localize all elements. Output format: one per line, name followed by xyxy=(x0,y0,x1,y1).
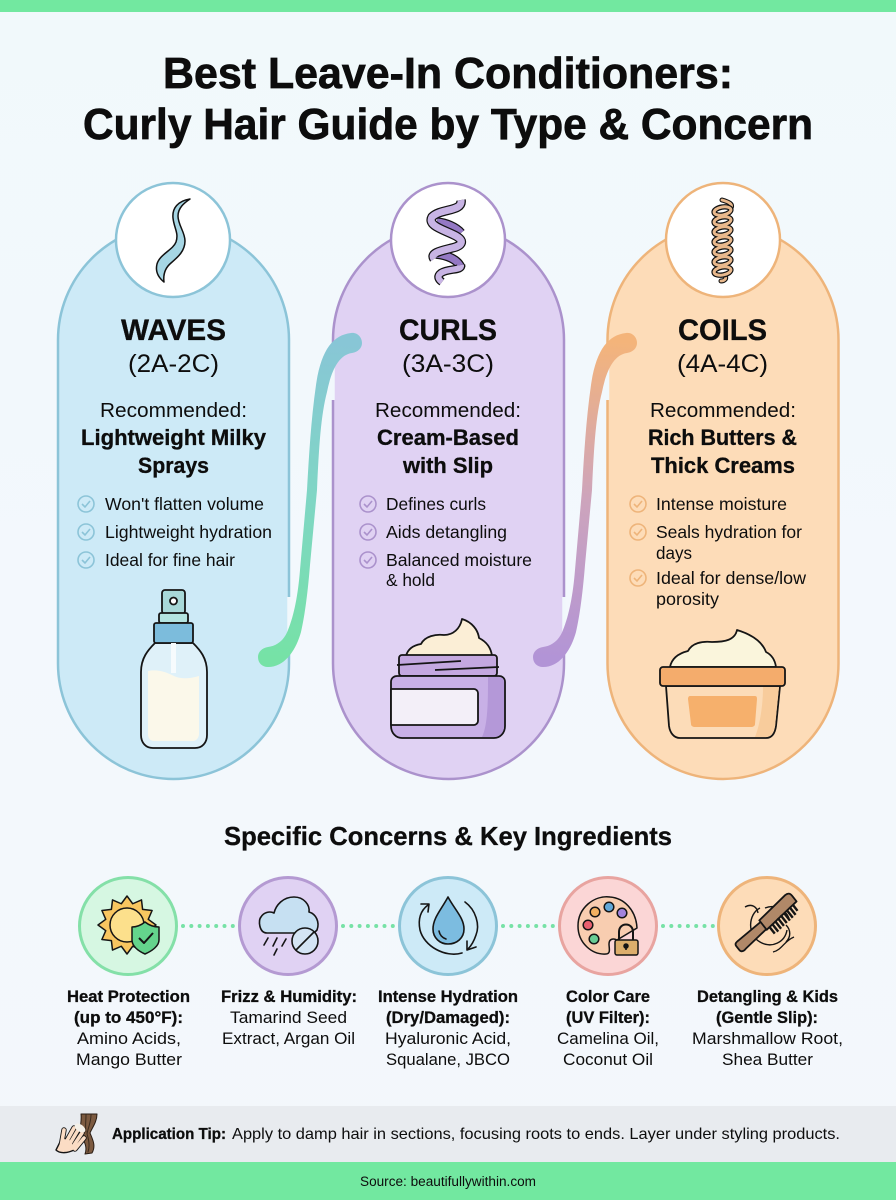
coils heading: COILS xyxy=(678,314,767,347)
color care text: Coconut Oil xyxy=(563,1051,653,1069)
tip text: Application Tip: xyxy=(112,1126,226,1143)
curls benefits list: Defines curls xyxy=(386,494,486,514)
concern: color care xyxy=(557,878,659,1069)
coils benefits list xyxy=(630,494,806,609)
tip text: Apply to damp hair in sections, focusing roots to ends. Layer under styling products. xyxy=(232,1126,840,1143)
detangling text: Shea Butter xyxy=(722,1051,814,1069)
application tip bar xyxy=(0,1106,896,1162)
curls heading: CURLS xyxy=(399,314,497,347)
frizz text xyxy=(221,988,357,1048)
icon: sun with shield xyxy=(98,896,159,954)
dotted connectors xyxy=(183,924,714,928)
icon: rain cloud with no sign xyxy=(259,897,318,955)
heat protection text: (up to 450°F): xyxy=(74,1009,183,1027)
icon circle: coil strand xyxy=(666,183,780,297)
waves heading: WAVES xyxy=(121,314,226,347)
heat protection text: Mango Butter xyxy=(76,1051,183,1069)
concern: intense hydration xyxy=(378,878,518,1069)
curls benefits list: Balanced moisture xyxy=(386,550,532,570)
title: Best Leave-In Conditioners: xyxy=(163,49,733,98)
coils benefits list: days xyxy=(656,543,692,563)
coils benefits list: Seals hydration for xyxy=(656,522,802,542)
panel: waves xyxy=(58,183,289,779)
coils recommendation: Rich Butters & xyxy=(648,425,797,450)
waves benefits list: Won't flatten volume xyxy=(105,494,264,514)
detangling text: Detangling & Kids xyxy=(697,988,838,1006)
icon: hand applying to hair xyxy=(56,1114,97,1154)
title: Curly Hair Guide by Type & Concern xyxy=(83,100,813,149)
waves recommendation xyxy=(81,400,267,478)
detangling text: Marshmallow Root, xyxy=(692,1030,843,1048)
curls range: (3A-3C) xyxy=(402,350,494,378)
hydration text: (Dry/Damaged): xyxy=(386,1009,510,1027)
coils benefits list: Ideal for dense/low xyxy=(656,568,806,588)
arrow: waves to curls connector xyxy=(258,333,362,667)
icon: spray bottle xyxy=(141,590,207,748)
coils recommendation xyxy=(648,400,797,478)
hydration text: Intense Hydration xyxy=(378,988,518,1006)
concern: heat protection xyxy=(67,878,190,1069)
icon circle: curl strand xyxy=(391,183,505,297)
waves recommendation: Lightweight Milky xyxy=(81,425,267,450)
color care text xyxy=(557,988,659,1069)
arrow: curls to coils connector xyxy=(533,333,637,667)
icon circle: wave strand xyxy=(116,183,230,297)
top green band xyxy=(0,0,896,12)
coils benefits list: Intense moisture xyxy=(656,494,787,514)
section heading: Specific Concerns & Key Ingredients xyxy=(224,821,672,851)
color care text: Camelina Oil, xyxy=(557,1030,659,1048)
curls recommendation: with Slip xyxy=(402,453,493,478)
coils recommendation: Recommended: xyxy=(650,400,796,422)
curls recommendation: Recommended: xyxy=(375,400,521,422)
waves benefits list: Lightweight hydration xyxy=(105,522,272,542)
waves recommendation: Recommended: xyxy=(100,400,247,422)
frizz text: Tamarind Seed xyxy=(230,1009,347,1027)
concern: detangling and kids xyxy=(692,878,843,1069)
heat protection text: Amino Acids, xyxy=(77,1030,181,1048)
coils recommendation: Thick Creams xyxy=(651,453,795,478)
panel: curls xyxy=(333,183,564,779)
frizz text: Extract, Argan Oil xyxy=(222,1030,355,1048)
icon: comb and hair xyxy=(730,892,804,957)
color care text: (UV Filter): xyxy=(566,1009,650,1027)
waves benefits list xyxy=(78,494,272,570)
waves benefits list: Ideal for fine hair xyxy=(105,550,235,570)
hydration text: Squalane, JBCO xyxy=(386,1051,510,1069)
curls recommendation: Cream-Based xyxy=(377,425,519,450)
detangling text xyxy=(692,988,843,1069)
hydration text xyxy=(378,988,518,1069)
source footer: Source: beautifullywithin.com xyxy=(360,1174,536,1189)
icon: water drop with arrows xyxy=(419,897,478,954)
curls benefits list xyxy=(360,494,532,590)
coils range: (4A-4C) xyxy=(677,350,768,378)
concern: frizz and humidity xyxy=(221,878,357,1048)
color care text: Color Care xyxy=(566,988,650,1006)
waves range: (2A-2C) xyxy=(128,350,219,378)
detangling text: (Gentle Slip): xyxy=(716,1009,818,1027)
hydration text: Hyaluronic Acid, xyxy=(385,1030,511,1048)
heat protection text: Heat Protection xyxy=(67,988,190,1006)
frizz text: Frizz & Humidity: xyxy=(221,988,357,1006)
panel: coils xyxy=(608,183,838,779)
curls recommendation xyxy=(375,400,521,478)
heat protection text xyxy=(67,988,190,1069)
icon: cream jar xyxy=(391,619,505,738)
curls benefits list: & hold xyxy=(386,570,435,590)
coils benefits list: porosity xyxy=(656,589,719,609)
title xyxy=(83,49,813,149)
icon: palette with lock xyxy=(578,897,638,955)
icon: butter tub xyxy=(660,630,785,738)
source footer xyxy=(0,1162,896,1200)
curls benefits list: Aids detangling xyxy=(386,522,507,542)
waves recommendation: Sprays xyxy=(138,453,209,478)
